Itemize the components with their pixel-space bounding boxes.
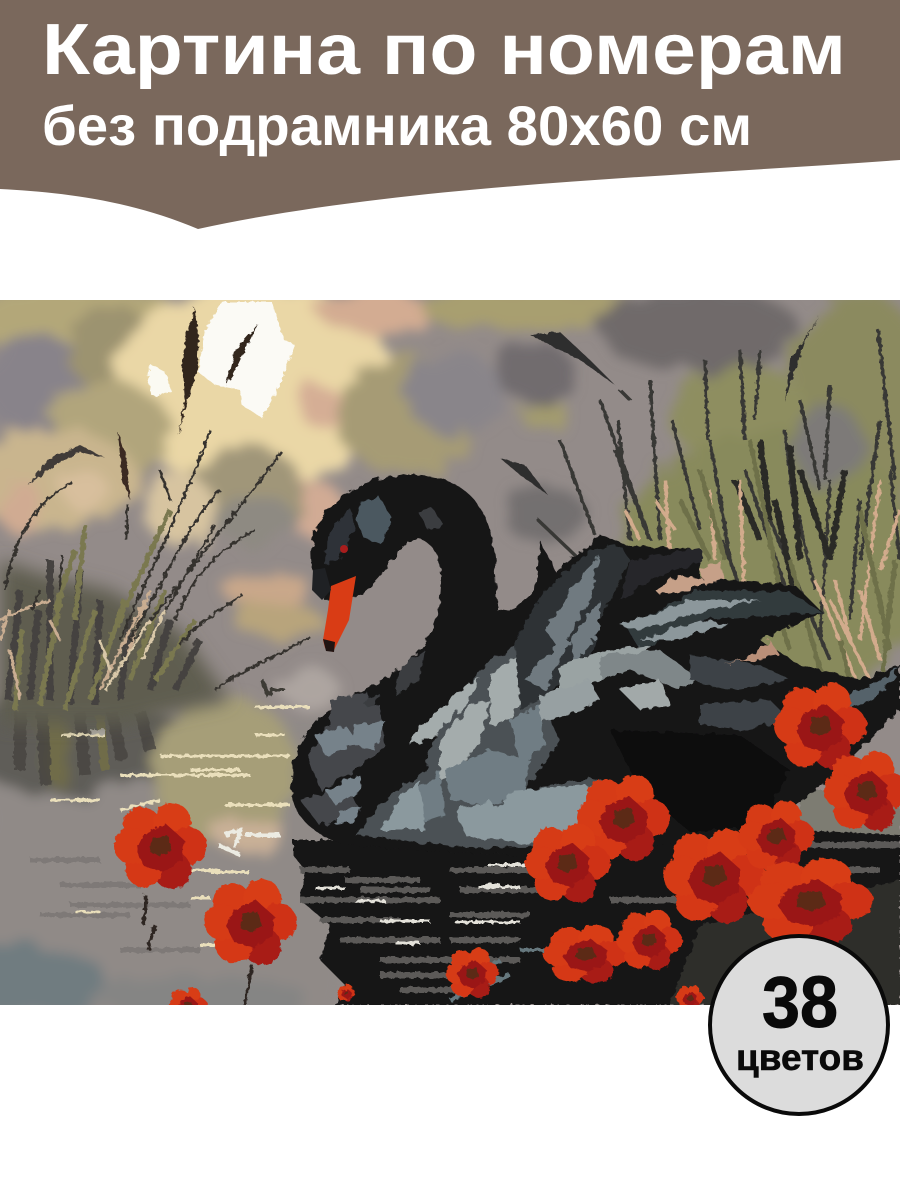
cattail heads — [178, 308, 258, 436]
number: 38 — [762, 963, 838, 1043]
label: цветов — [736, 1037, 864, 1078]
sky and clouds — [0, 300, 900, 680]
badge: colour count — [710, 936, 888, 1114]
reeds right — [538, 330, 900, 700]
sun highlights — [148, 302, 295, 418]
chest feathers — [356, 646, 602, 850]
wing — [515, 545, 630, 710]
title: Картина по номерам — [42, 10, 846, 90]
water left — [0, 670, 340, 1020]
head highlight — [356, 497, 392, 545]
swan — [291, 475, 900, 858]
subtitle: без подрамника 80х60 см — [42, 94, 752, 157]
neck highlights — [363, 507, 443, 708]
glimpses of reeds through wing — [655, 560, 725, 595]
header banner — [0, 0, 900, 229]
left body feathers — [300, 692, 385, 826]
dark water under swan — [293, 790, 900, 1005]
beak tip — [323, 639, 335, 652]
swan body and neck — [291, 475, 900, 858]
swan beak — [323, 576, 356, 652]
grass left — [0, 308, 820, 725]
poppies — [114, 683, 900, 1024]
swan eye — [340, 545, 348, 553]
water ripples — [10, 700, 310, 950]
painting: black swan among reeds and poppies — [0, 280, 900, 1024]
